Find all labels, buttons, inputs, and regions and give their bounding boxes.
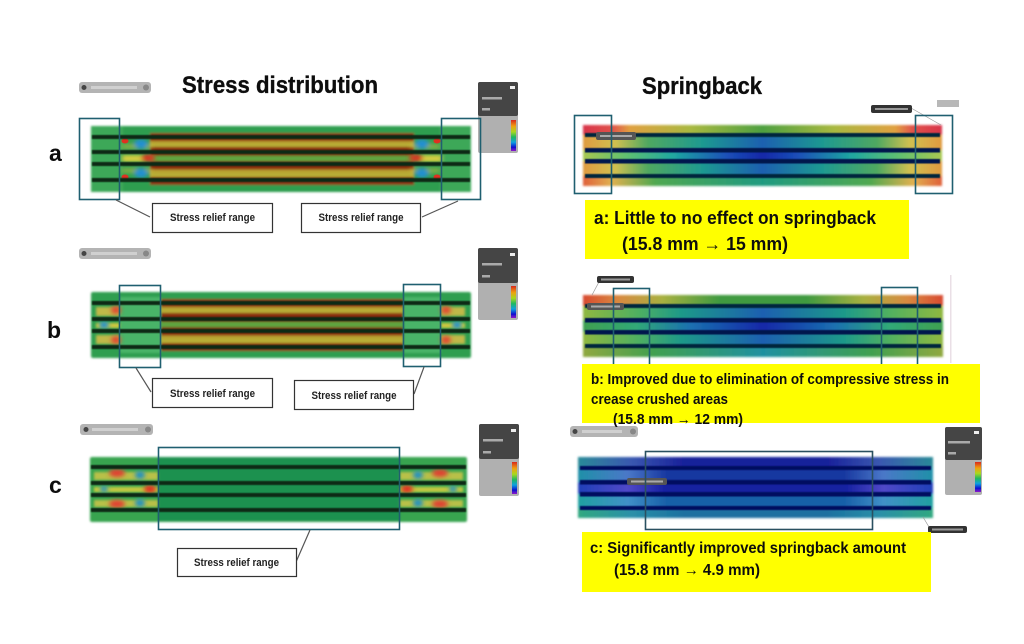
toolbar springback c [570,426,638,437]
toolbar a [79,82,151,93]
result note b [582,364,980,428]
result note b: crease crushed areas [591,391,728,408]
relief boxes stress b [120,284,440,368]
legend placeholder springback a [937,100,959,107]
springback strip b [583,295,943,357]
callout label b right: Stress relief range [312,390,396,402]
stress strip a [91,126,471,192]
row label b: b [47,317,61,343]
callout lines stress b [136,367,424,394]
row label a: a [49,140,62,166]
value tags springback a [596,105,941,140]
legend c [479,424,519,496]
callout label a left: Stress relief range [170,212,255,224]
result note c [582,532,931,592]
toolbar c [80,424,153,435]
result note a: (15.8 mm → 15 mm) [622,234,788,254]
result note b: b: Improved due to elimination of compressive stress in [591,371,949,388]
result note c: c: Significantly improved springback amount [590,540,907,557]
callout lines stress a [116,200,458,217]
value tags springback c [627,478,967,533]
callout label a right: Stress relief range [318,212,404,224]
toolbar b [79,248,151,259]
heading: Stress distribution: Stress distribution [182,72,378,99]
callout label b left: Stress relief range [170,388,255,400]
legend b [478,248,518,320]
springback strip a [583,125,942,186]
relief boxes stress a [80,118,480,200]
relief box springback c [646,452,872,530]
callout label b right [294,380,414,410]
result note a: a: Little to no effect on springback [594,208,877,228]
callout line stress c [296,530,310,562]
callout label b left [152,378,272,408]
legend springback c [945,427,982,495]
callout label a left [152,204,272,232]
vertical rule springback b [950,275,952,363]
result note a [585,200,909,259]
result note c: (15.8 mm → 4.9 mm) [614,562,760,579]
relief boxes springback b [614,288,918,368]
callout label a right [302,204,420,232]
heading: Springback: Springback [642,73,763,100]
stress strip b [91,292,471,358]
relief box stress c [158,448,400,530]
springback strip c [578,457,933,518]
value tags springback b [587,276,634,310]
row label c: c [49,472,62,498]
stress strip c [90,457,467,522]
legend a [478,82,518,153]
result note b: (15.8 mm → 12 mm) [613,411,743,428]
callout label c: Stress relief range [194,557,279,569]
callout label c [178,548,296,576]
relief boxes springback a [574,116,952,194]
